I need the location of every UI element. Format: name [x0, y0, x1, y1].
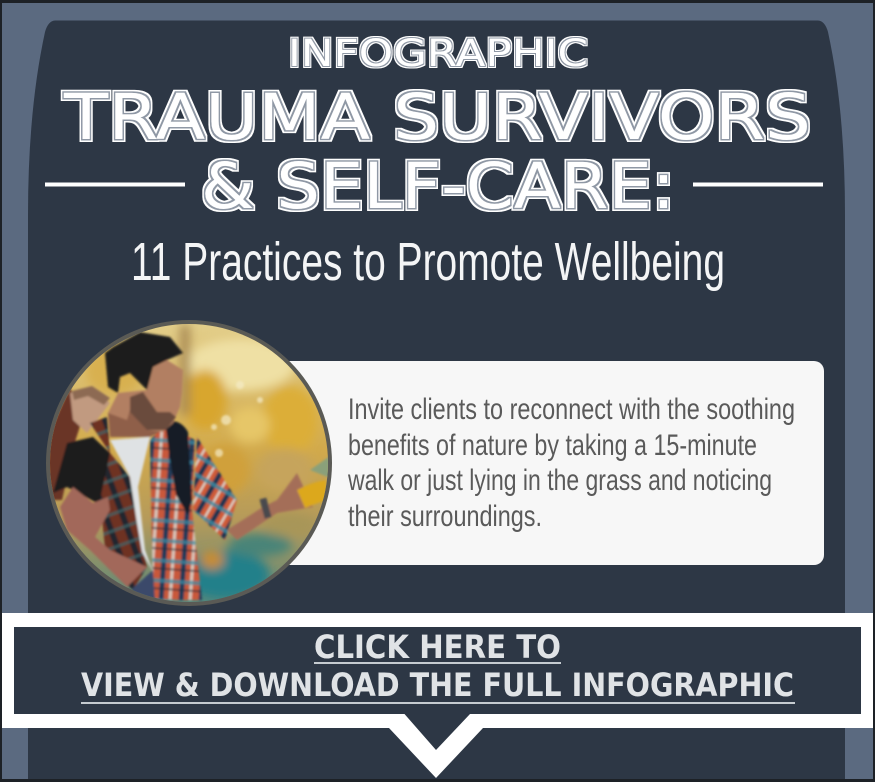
- face: [108, 360, 183, 432]
- jeans: [130, 570, 155, 600]
- heading: self-care with side rules: [45, 150, 823, 223]
- text card: [270, 361, 824, 565]
- left shirt panel: [90, 417, 147, 590]
- heading: trauma survivors: TRAUMA SURVIVORS: [63, 81, 811, 154]
- card body text: their surroundings.: [348, 500, 542, 533]
- call to action banner: [2, 613, 873, 778]
- right sleeve: [193, 437, 237, 540]
- shirt lower front: [150, 425, 202, 600]
- heading: self-care with side rules: & SELF-CARE:: [201, 150, 675, 223]
- card body text: [347, 393, 795, 533]
- heading: infographic: INFOGRAPHIC: [288, 32, 588, 75]
- backpack strap: [165, 421, 192, 515]
- circular photo: man hiking in autumn forest: [46, 320, 332, 606]
- neck: [107, 410, 160, 438]
- hair: [105, 332, 183, 393]
- bokeh highlights: [211, 381, 263, 457]
- cta line two: VIEW & DOWNLOAD THE FULL INFOGRAPHIC: [81, 666, 794, 704]
- banner white outline with pointer: [2, 613, 873, 778]
- forearm and hand: [227, 473, 313, 540]
- woman jacket: [53, 437, 110, 503]
- woman's hand on arm: [60, 487, 147, 587]
- cta line one: CLICK HERE TO: [314, 628, 561, 666]
- banner dark fill with pointer: [14, 627, 861, 750]
- woman hair: [50, 388, 81, 502]
- card body text: benefits of nature by taking a 15-minute: [348, 429, 757, 462]
- beard: [130, 392, 176, 430]
- woman face: [70, 387, 110, 433]
- yellow leaves: [297, 480, 326, 508]
- white t-shirt: [110, 437, 153, 572]
